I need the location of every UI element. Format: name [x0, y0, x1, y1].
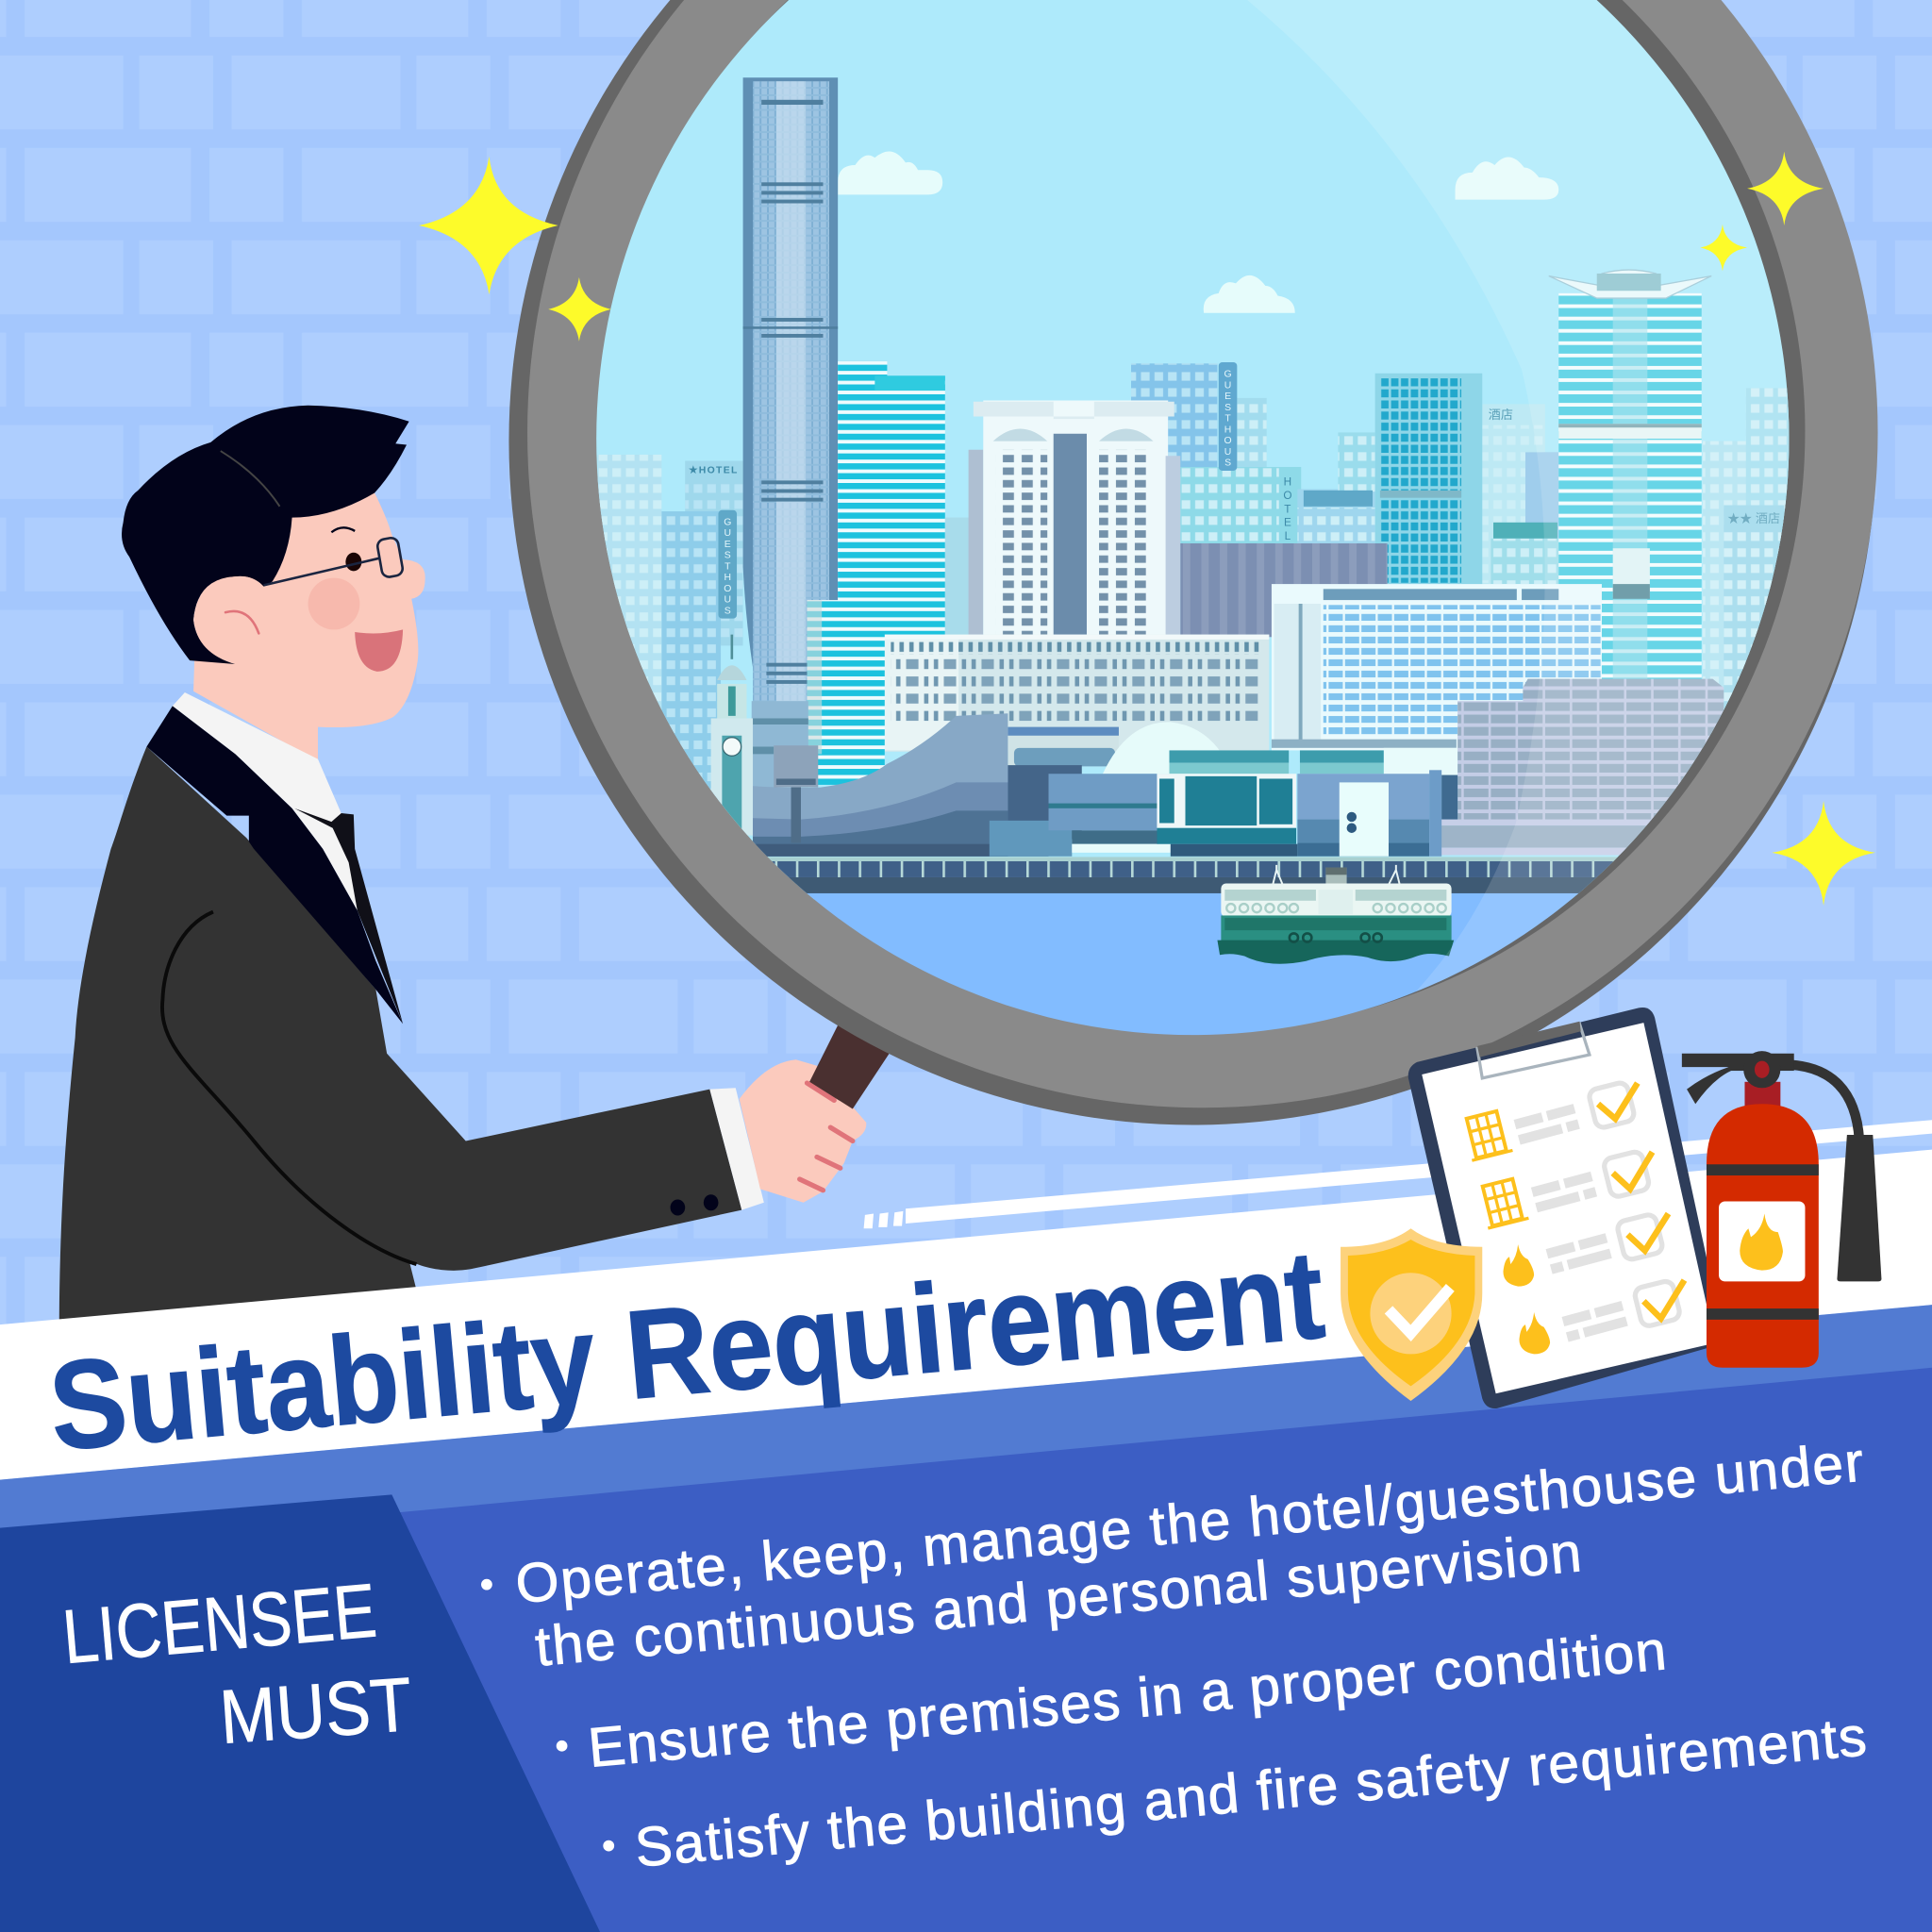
handle: [1682, 1054, 1794, 1104]
grey low-rise: [1457, 679, 1724, 823]
teal towers: [838, 361, 983, 635]
dome: [1103, 722, 1232, 774]
large hotel with blue windows: [1272, 584, 1602, 777]
shield icon: [1341, 1228, 1482, 1401]
white title band: [0, 1150, 1932, 1480]
tie: [294, 808, 403, 1024]
licensee must label: [59, 1569, 415, 1760]
hose: [1787, 1064, 1859, 1140]
lens glare: [1247, 0, 1789, 991]
checklist row 3: [1503, 1244, 1534, 1287]
building signs: 酒店: [1489, 408, 1513, 422]
magnifying glass: [508, 0, 1878, 1124]
neck and face: [193, 492, 425, 761]
checklist row 4: [1519, 1312, 1550, 1354]
valve head: [1743, 1051, 1780, 1088]
cultural centre roof: [753, 713, 1049, 857]
label: [1719, 1201, 1805, 1281]
lens: harbour skyline scene: [591, 0, 1848, 1047]
checklist row 1: [1462, 1109, 1512, 1160]
licensee must label: MUST: [217, 1662, 415, 1760]
pale background buildings: [597, 363, 1790, 824]
hand: [740, 1059, 866, 1203]
building signs: O: [724, 584, 731, 594]
building signs: ★HOTEL: [688, 466, 739, 476]
central white hotel: [974, 400, 1180, 641]
licensee must label: LICENSEE: [59, 1569, 380, 1680]
building signs: [688, 362, 1780, 619]
businessman: [59, 406, 866, 1343]
waterfront base: [1436, 820, 1661, 855]
right tall tower: [1549, 270, 1711, 681]
eyebrow: [331, 527, 355, 532]
bullet: fire safety: Satisfy the building and fire safety requirements: [633, 1706, 1869, 1879]
bullet: supervision: Operate, keep, manage the hotel/guesthouse under: [513, 1432, 1866, 1615]
title: Suitability Requirement: [44, 1224, 1329, 1477]
building signs: T: [1284, 503, 1291, 515]
building signs: H: [1284, 476, 1291, 489]
museum blocks: [990, 750, 1457, 857]
main blue panel: [391, 1368, 1932, 1932]
sky tower: [743, 77, 838, 702]
hair: [122, 406, 409, 664]
back terminal band: [1008, 727, 1119, 766]
sparkles: [419, 152, 1875, 906]
building signs: U: [724, 528, 731, 539]
cylinder: [1707, 1104, 1819, 1368]
ferry: [1217, 865, 1454, 964]
licensee panel: [0, 1494, 600, 1932]
checklist row 2: [1478, 1177, 1528, 1228]
building signs: T: [1224, 414, 1231, 425]
eye: [345, 553, 361, 571]
building signs: U: [724, 595, 731, 606]
neck: [1744, 1082, 1780, 1107]
lapel: [146, 706, 403, 1024]
mouth: [355, 629, 403, 672]
building signs: O: [1283, 490, 1291, 502]
teal low tower: [808, 600, 885, 785]
building signs: H: [1224, 425, 1231, 435]
shirt collar: [173, 692, 358, 910]
building signs: G: [724, 517, 731, 527]
building signs: E: [1224, 391, 1231, 402]
mid blue band: [0, 1305, 1932, 1553]
teal grid tower: [1375, 374, 1482, 585]
observation box on post: [774, 745, 818, 842]
bullet: supervision: the continuous and personal supervision: [533, 1522, 1584, 1678]
ring: [508, 0, 1878, 1124]
building signs: S: [1224, 458, 1231, 469]
clouds: [838, 151, 1558, 313]
clip: [1477, 1022, 1590, 1078]
cheek: [308, 578, 359, 629]
promenade: [740, 857, 1675, 893]
hair highlight: [221, 451, 279, 507]
ear: [193, 576, 265, 664]
building signs: U: [1224, 447, 1231, 458]
building signs: ★★ 酒店: [1727, 511, 1780, 525]
cuff buttons: [671, 1194, 718, 1215]
building signs: U: [1224, 380, 1231, 391]
bullet: premises: Ensure the premises in a proper condition: [586, 1620, 1669, 1779]
grey building: [1180, 543, 1388, 637]
arm crease: [162, 912, 416, 1264]
magnifier handle: [809, 1023, 893, 1109]
fire extinguisher: [1682, 1051, 1881, 1368]
white door block: [1340, 782, 1389, 857]
building signs: S: [1224, 403, 1231, 413]
clipboard: [1408, 1008, 1725, 1408]
building signs: G: [1224, 370, 1232, 380]
building signs: T: [724, 561, 731, 572]
building signs: O: [1224, 436, 1232, 446]
building signs: E: [1284, 517, 1291, 529]
building signs: S: [724, 606, 731, 616]
banner decorations: [864, 1120, 1932, 1228]
building signs: E: [724, 540, 731, 550]
building signs: H: [724, 573, 731, 583]
flame: [1740, 1214, 1783, 1271]
building signs: L: [1285, 530, 1291, 542]
glasses: [264, 537, 404, 585]
heritage hotel block: [883, 635, 1269, 752]
nozzle: [1837, 1135, 1881, 1281]
clock tower: [711, 635, 753, 841]
shirt cuff: [709, 1088, 764, 1210]
low block behind clock tower: [752, 701, 808, 788]
suit body: [59, 747, 741, 1343]
building signs: S: [724, 551, 731, 561]
